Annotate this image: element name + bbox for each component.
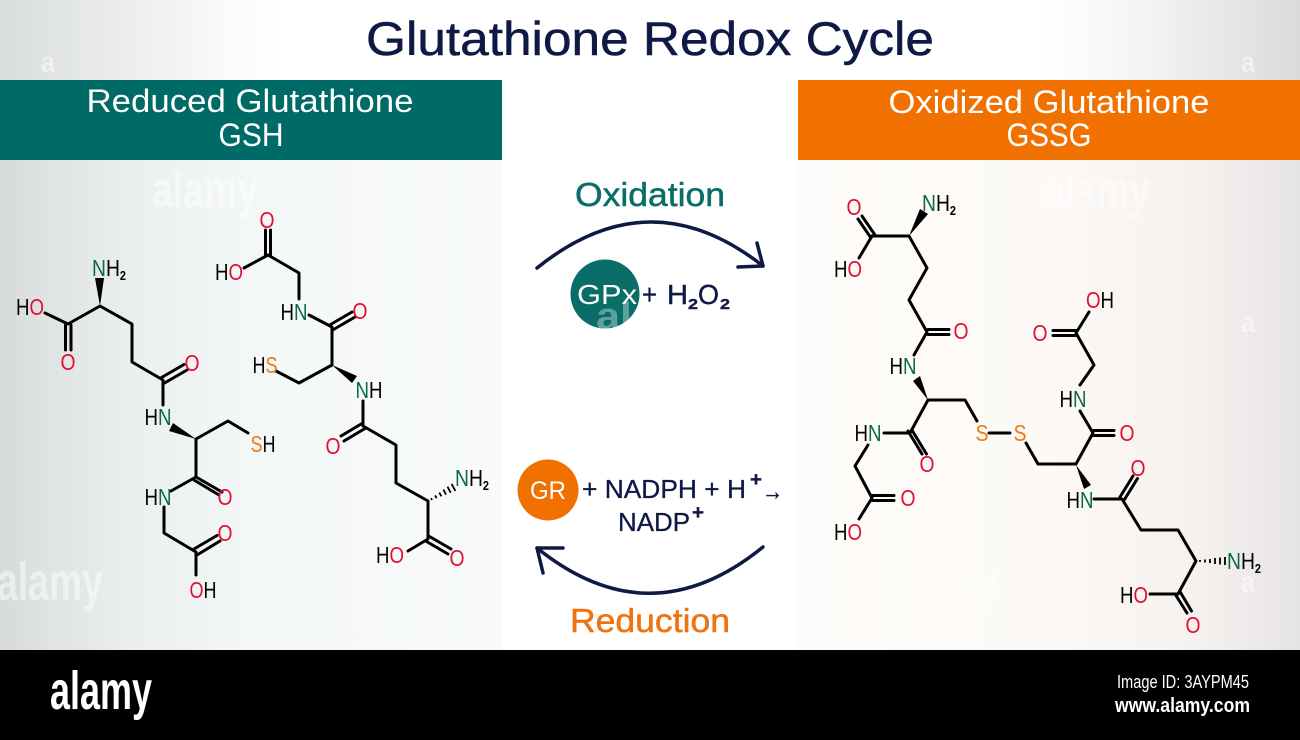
molecule: GSH left structure: O <box>60 349 76 375</box>
watermarks: alamy <box>891 552 999 612</box>
text: reduction reagents: + <box>692 502 704 524</box>
molecule: GSSG: HO <box>1120 582 1148 608</box>
text: reduction reagents: + <box>750 469 762 491</box>
molecule: GSSG <box>834 190 1261 638</box>
title: Glutathione Redox Cycle <box>366 12 934 65</box>
icon: GPx enzyme circle <box>570 260 640 328</box>
heading band: oxidized glutathione <box>798 80 1300 160</box>
text: reduction reagents: → <box>762 476 783 506</box>
molecule: GSSG: S <box>976 420 988 446</box>
text: reduction reagents: NADP <box>618 507 690 537</box>
molecule: GSSG: HO <box>834 256 862 282</box>
molecule: GSSG: O <box>920 451 934 477</box>
footer website: www.alamy.com <box>1114 695 1250 717</box>
molecule: GSH left structure: OH <box>190 577 216 603</box>
molecule: GSSG: HN <box>890 353 916 379</box>
watermarks: a <box>1241 566 1255 599</box>
arrow: reduction <box>537 547 763 593</box>
heading band: oxidized glutathione: Oxidized Glutathione <box>888 84 1210 120</box>
text: plus hydrogen peroxide <box>642 279 730 313</box>
panel: reduced glutathione background <box>0 160 502 650</box>
footer logo: alamy <box>50 661 152 721</box>
molecule: GSH left structure: O <box>184 350 200 376</box>
watermarks: a <box>41 46 55 79</box>
molecule: GSSG: O <box>1186 612 1200 638</box>
molecule: GSSG: 2 <box>1255 561 1261 576</box>
molecule: GSSG: 2 <box>950 203 956 218</box>
icon: GR enzyme circle <box>518 460 578 520</box>
heading band: reduced glutathione <box>0 80 502 160</box>
molecule: GSSG: OH <box>1086 287 1114 313</box>
watermarks: alamy <box>0 552 103 612</box>
molecule: GSH left structure: SH <box>250 431 276 457</box>
footer bar <box>0 650 1300 740</box>
molecule: GSH right structure: O <box>352 298 368 324</box>
molecule: GSH right structure: HO <box>376 542 404 568</box>
molecule: GSH right structure: NH <box>356 377 382 403</box>
molecule: GSH left structure: HO <box>16 294 44 320</box>
molecule: GSH left structure: HN <box>144 404 172 430</box>
heading band: oxidized glutathione: GSSG <box>1006 117 1092 153</box>
molecule: GSSG: O <box>1032 320 1048 346</box>
text: plus hydrogen peroxide: H <box>667 279 688 310</box>
icon: GPx enzyme circle: al <box>596 296 632 338</box>
molecule: GSSG: HN <box>1060 386 1086 412</box>
molecule: GSH left structure: 2 <box>120 268 126 283</box>
molecule: GSSG: O <box>900 485 916 511</box>
molecule: GSH right structure <box>215 207 489 571</box>
arrow: oxidation <box>537 222 763 268</box>
heading band: reduced glutathione: Reduced Glutathione <box>86 83 414 119</box>
icon: GR enzyme circle: GR <box>530 477 566 505</box>
molecule: GSH right structure: 2 <box>483 478 489 493</box>
molecule: GSH right structure: HO <box>215 259 243 285</box>
watermarks: a <box>1241 306 1255 339</box>
molecule: GSSG: HO <box>834 519 862 545</box>
molecule: GSH left structure: NH <box>92 255 123 281</box>
text: reduction reagents: + NADPH + H <box>582 474 746 504</box>
molecule: GSSG: HN <box>1066 487 1094 513</box>
molecule: GSH right structure: O <box>326 433 340 459</box>
text: plus hydrogen peroxide: + <box>642 279 657 310</box>
molecule: GSH right structure: O <box>450 545 464 571</box>
text: plus hydrogen peroxide: O <box>698 279 719 310</box>
molecule: GSSG: NH <box>922 190 953 216</box>
molecule: GSH right structure: NH <box>455 465 486 491</box>
label: reduction: Reduction <box>570 602 730 639</box>
text: plus hydrogen peroxide: 2 <box>720 296 730 313</box>
watermarks: alamy <box>1044 162 1150 220</box>
molecule: GSSG: O <box>1120 420 1134 446</box>
molecule: GSSG: HN <box>854 420 882 446</box>
molecule: GSH left structure: O <box>218 484 232 510</box>
molecule: GSH left structure <box>16 255 276 603</box>
molecule: GSH right structure: HS <box>252 352 278 378</box>
icon: GPx enzyme circle: GPx <box>577 279 637 310</box>
watermarks: a <box>1241 46 1255 79</box>
text: plus hydrogen peroxide: 2 <box>688 296 698 313</box>
molecule: GSSG: S <box>1014 420 1026 446</box>
heading band: reduced glutathione: GSH <box>218 117 284 153</box>
molecule: GSSG: O <box>846 194 862 220</box>
watermarks: alamy <box>152 161 258 219</box>
molecule: GSH right structure: O <box>260 207 274 233</box>
molecule: GSH left structure: HN <box>144 484 172 510</box>
molecule: GSSG: O <box>1130 455 1146 481</box>
label: oxidation: Oxidation <box>575 176 725 213</box>
footer image id: Image ID: 3AYPM45 <box>1117 672 1249 692</box>
watermarks <box>0 46 1255 612</box>
top header background <box>0 0 1300 80</box>
molecule: GSSG: O <box>954 318 968 344</box>
molecule: GSH left structure: O <box>218 520 232 546</box>
text: reduction reagents <box>582 469 783 537</box>
panel: oxidized glutathione background <box>798 160 1300 650</box>
molecule: GSH right structure: HN <box>280 299 308 325</box>
molecule: GSSG: NH <box>1227 548 1258 574</box>
